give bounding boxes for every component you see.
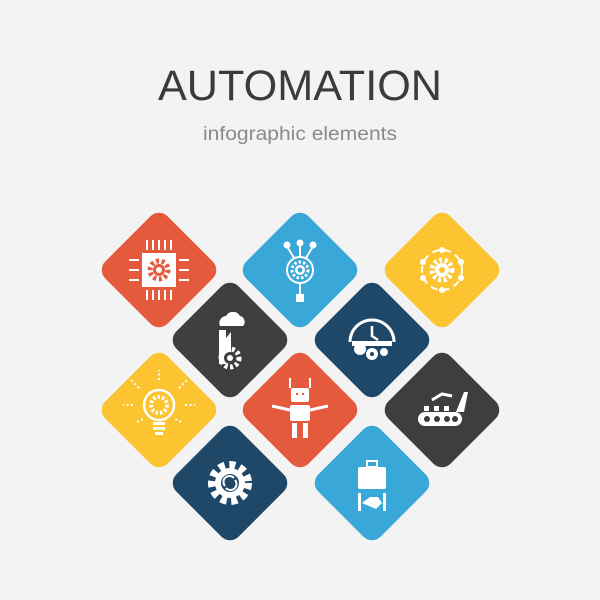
- tile: robot (red): [238, 348, 362, 472]
- title: AUTOMATION: [158, 62, 442, 110]
- tile: gear cycle (yellow): [380, 208, 504, 332]
- tile: business deal (blue): [310, 421, 434, 545]
- tile: network gear (blue): [238, 208, 362, 332]
- tile: chip (red): [97, 208, 221, 332]
- subtitle: infographic elements: [203, 124, 397, 145]
- tile: gear refresh (navy): [168, 421, 292, 545]
- tile: idea bulb (yellow): [97, 348, 221, 472]
- tile: clock gears (navy): [310, 278, 434, 402]
- tile: factory (dark): [168, 278, 292, 402]
- tile: conveyor (dark): [380, 348, 504, 472]
